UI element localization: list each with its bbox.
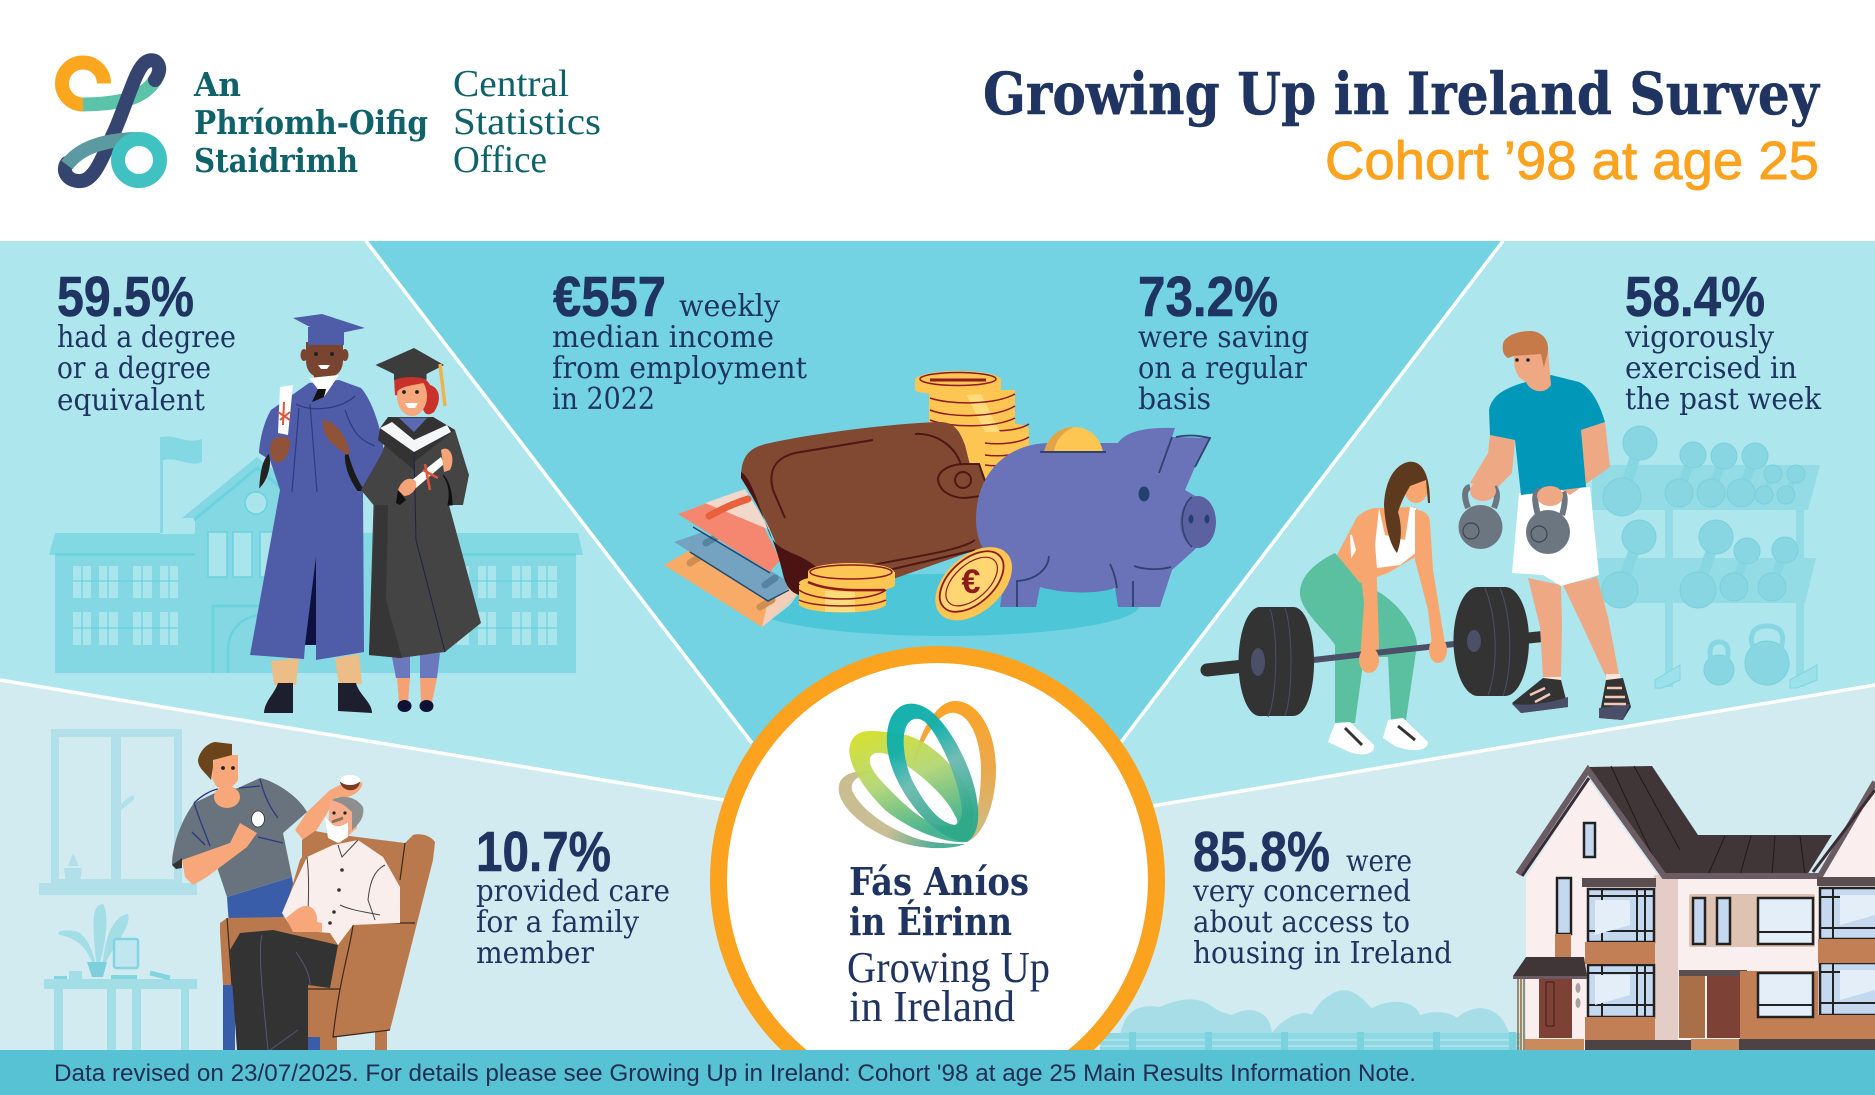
stat: income €557: weekly <box>679 289 780 324</box>
logo Irish name: Staidrimh <box>194 141 358 180</box>
stat: housing 85.8%: housing in Ireland <box>1193 936 1452 971</box>
logo Irish name: Phríomh-Oifig <box>194 103 428 142</box>
stat: saving 73.2%: were saving <box>1138 320 1309 355</box>
stat: degree 59.5%: equivalent <box>57 383 205 418</box>
stat: income €557: median income <box>552 320 774 355</box>
illustration: carer shaving older man <box>172 742 435 1050</box>
logo English name: Central <box>453 63 569 105</box>
illustration: hedges and fence <box>1100 990 1520 1050</box>
stat: income €557 <box>552 265 807 417</box>
illustration: barbell <box>1207 636 1548 670</box>
illustration: leaning euro coin <box>921 533 1026 635</box>
logo mark <box>62 60 160 181</box>
badge English name: Growing Up <box>847 943 1050 992</box>
logo Irish name: An <box>193 65 241 104</box>
badge Irish name <box>849 859 1029 944</box>
illustration: coin stack behind wallet <box>915 371 1029 480</box>
stat: degree 59.5%: had a degree <box>57 320 236 355</box>
stat: exercise 58.4%: exercised in <box>1625 351 1797 386</box>
stat: degree 59.5% <box>57 265 236 418</box>
logo Irish name <box>193 65 428 180</box>
illustration: trainer with kettlebells <box>1458 331 1631 720</box>
illustration: male graduate <box>250 314 384 713</box>
logo: Central Statistics Office <box>62 60 601 181</box>
stat: care 10.7% <box>476 820 670 971</box>
stat: exercise 58.4%: the past week <box>1625 382 1822 417</box>
illustration: houses <box>1513 766 1875 1050</box>
stat: income €557: from employment <box>552 351 807 386</box>
badge English name <box>847 943 1050 1031</box>
illustration: leaning euro coin: € <box>962 563 981 601</box>
stat: saving 73.2%: 73.2% <box>1138 265 1278 329</box>
stat: exercise 58.4%: vigorously <box>1624 320 1774 355</box>
illustration: piggy bank <box>976 427 1216 607</box>
stat: care 10.7%: member <box>476 936 595 971</box>
badge Irish name: Fás Aníos <box>849 859 1029 904</box>
logo English name <box>453 63 601 181</box>
stat: saving 73.2%: basis <box>1138 382 1211 417</box>
panels background <box>0 241 1875 1051</box>
stat: degree 59.5%: or a degree <box>57 351 211 386</box>
illustration: school building <box>49 436 583 673</box>
footer note: Data revised on 23/07/2025. For details please see Growing Up in Ireland: Cohort '98 at age 25 Main Results Information Note. <box>54 1060 1416 1087</box>
illustration: barbell front <box>1238 587 1529 754</box>
logo English name: Statistics <box>453 101 601 143</box>
central circle badge <box>718 654 1156 1095</box>
illustration: wallet <box>741 422 990 595</box>
stat: income €557: €557 <box>553 265 666 329</box>
illustration: gym rack <box>1592 426 1820 688</box>
stat: degree 59.5%: 59.5% <box>57 265 194 329</box>
illustration: banknotes <box>664 489 801 627</box>
badge Irish name: in Éirinn <box>849 899 1012 944</box>
footer bar <box>0 1050 1875 1095</box>
stat: housing 85.8% <box>1192 820 1452 971</box>
stat: saving 73.2%: on a regular <box>1138 351 1308 386</box>
subtitle: Cohort ’98 at age 25 <box>1325 131 1819 191</box>
illustration: window and room background <box>39 729 197 1050</box>
stat: care 10.7%: for a family <box>476 905 639 940</box>
logo: Growing Up in Ireland petals <box>839 701 996 848</box>
stat: housing 85.8%: about access to <box>1193 905 1410 940</box>
stat: exercise 58.4%: 58.4% <box>1625 265 1765 329</box>
badge English name: in Ireland <box>849 982 1015 1031</box>
stat: care 10.7%: 10.7% <box>476 820 611 884</box>
stat: housing 85.8%: 85.8% <box>1193 820 1330 884</box>
illustration: front coin stack <box>799 563 895 612</box>
stat: saving 73.2% <box>1138 265 1309 417</box>
stat: exercise 58.4% <box>1624 265 1822 417</box>
stat: care 10.7%: provided care <box>476 874 670 909</box>
stat: housing 85.8%: very concerned <box>1192 874 1411 909</box>
illustration: female graduate <box>361 348 481 712</box>
stat: income €557: in 2022 <box>552 382 655 417</box>
stat: housing 85.8%: were <box>1346 844 1412 879</box>
illustration: savings shadow <box>750 574 1140 636</box>
illustration: woman lifting <box>1300 462 1446 723</box>
logo English name: Office <box>453 139 547 181</box>
